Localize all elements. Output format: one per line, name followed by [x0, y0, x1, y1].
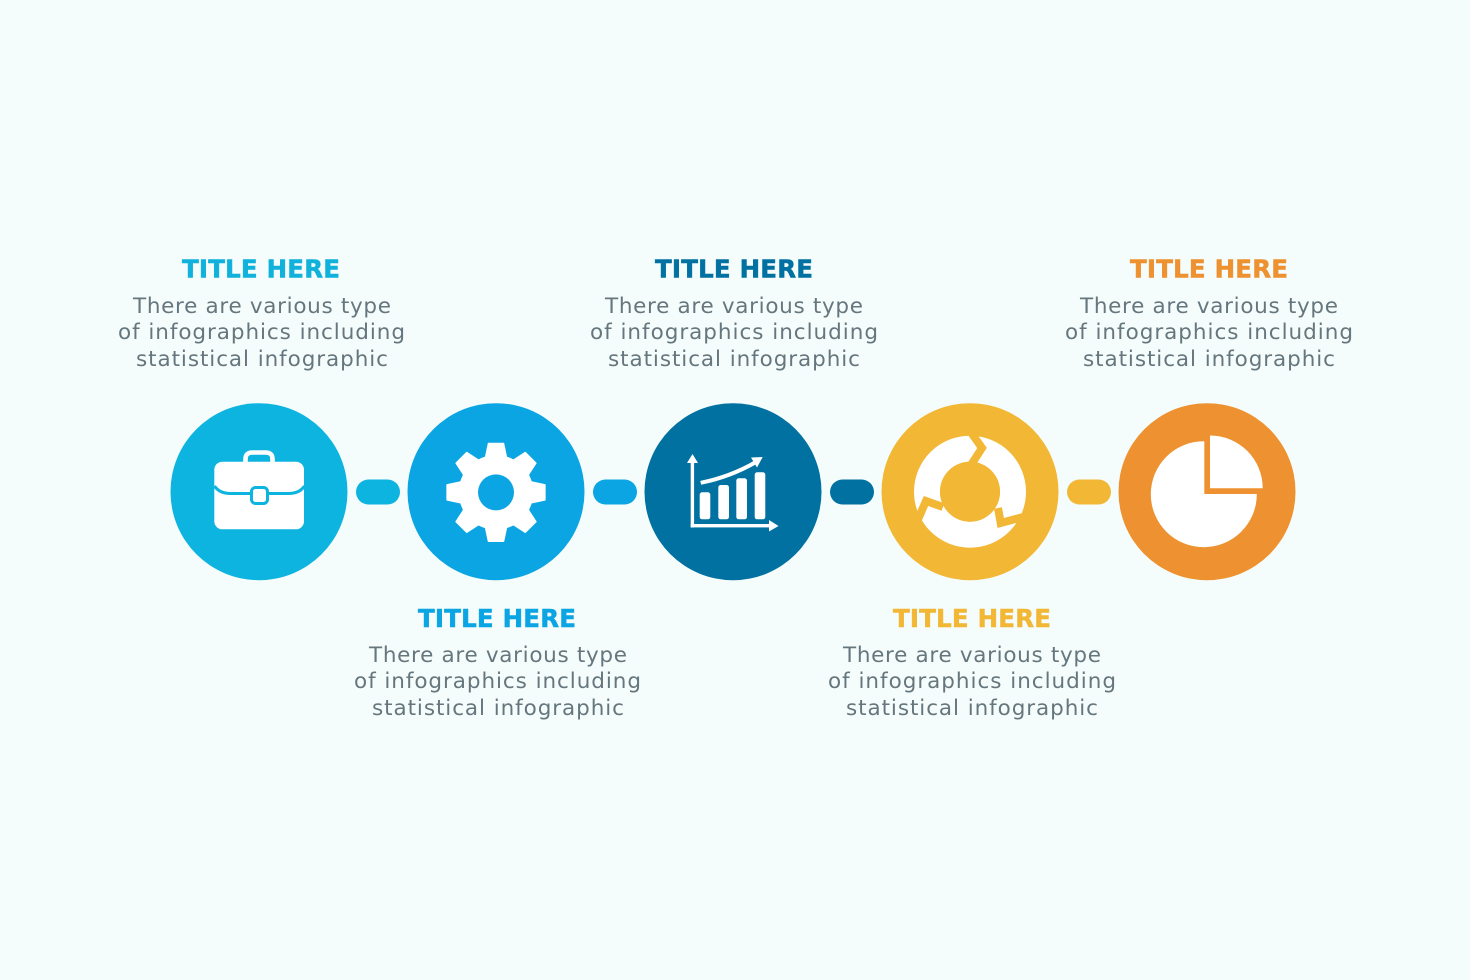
step 3 description: of infographics including	[590, 320, 878, 345]
step 2 title: TITLE HERE	[418, 604, 576, 633]
step 2 description	[354, 643, 641, 721]
step 1 description: statistical infographic	[136, 347, 388, 372]
step 5 description: There are various type	[1079, 294, 1338, 319]
circle 1 with briefcase icon	[170, 403, 348, 580]
connector pill 2	[593, 480, 637, 504]
step 5 description: of infographics including	[1065, 320, 1353, 345]
step 2 description: of infographics including	[354, 669, 641, 694]
step 3 title: TITLE HERE	[655, 254, 813, 284]
step 1 description: of infographics including	[118, 320, 405, 345]
circle 4 with cycle icon	[882, 403, 1058, 580]
step 4 text block	[828, 604, 1116, 721]
step 2 description: statistical infographic	[372, 696, 624, 721]
step 3 description	[590, 294, 878, 372]
step 5 description: statistical infographic	[1083, 347, 1335, 372]
step 5 text block	[1065, 254, 1353, 372]
step 1 description	[118, 294, 405, 372]
step 4 title: TITLE HERE	[893, 604, 1051, 633]
step 3 text block	[590, 254, 878, 372]
step 1 description: There are various type	[132, 294, 391, 319]
connector pill 3	[830, 480, 874, 504]
step 3 description: statistical infographic	[608, 347, 860, 372]
icon: gear	[447, 444, 545, 541]
step 1 title: TITLE HERE	[182, 254, 340, 284]
icon: briefcase	[214, 452, 304, 529]
icon: growth chart	[687, 454, 778, 532]
step 2 description: There are various type	[368, 643, 627, 668]
step 4 description: of infographics including	[828, 669, 1116, 694]
step 5 title: TITLE HERE	[1130, 254, 1288, 284]
step 4 description: There are various type	[842, 643, 1101, 668]
step 2 text block	[354, 604, 641, 721]
circle 2 with gear icon	[408, 403, 584, 580]
circle 5 with pie chart icon	[1118, 403, 1296, 580]
circle 3 with growth chart icon	[644, 403, 822, 580]
connector pill 4	[1067, 480, 1111, 504]
step 4 description: statistical infographic	[846, 696, 1098, 721]
step 3 description: There are various type	[604, 294, 863, 319]
step 4 description	[828, 643, 1116, 721]
connector pill 1	[356, 480, 400, 504]
icon: cycle ring	[916, 431, 1027, 535]
step 1 text block	[118, 254, 405, 372]
step 5 description	[1065, 294, 1353, 372]
icon: pie chart	[1151, 436, 1263, 547]
